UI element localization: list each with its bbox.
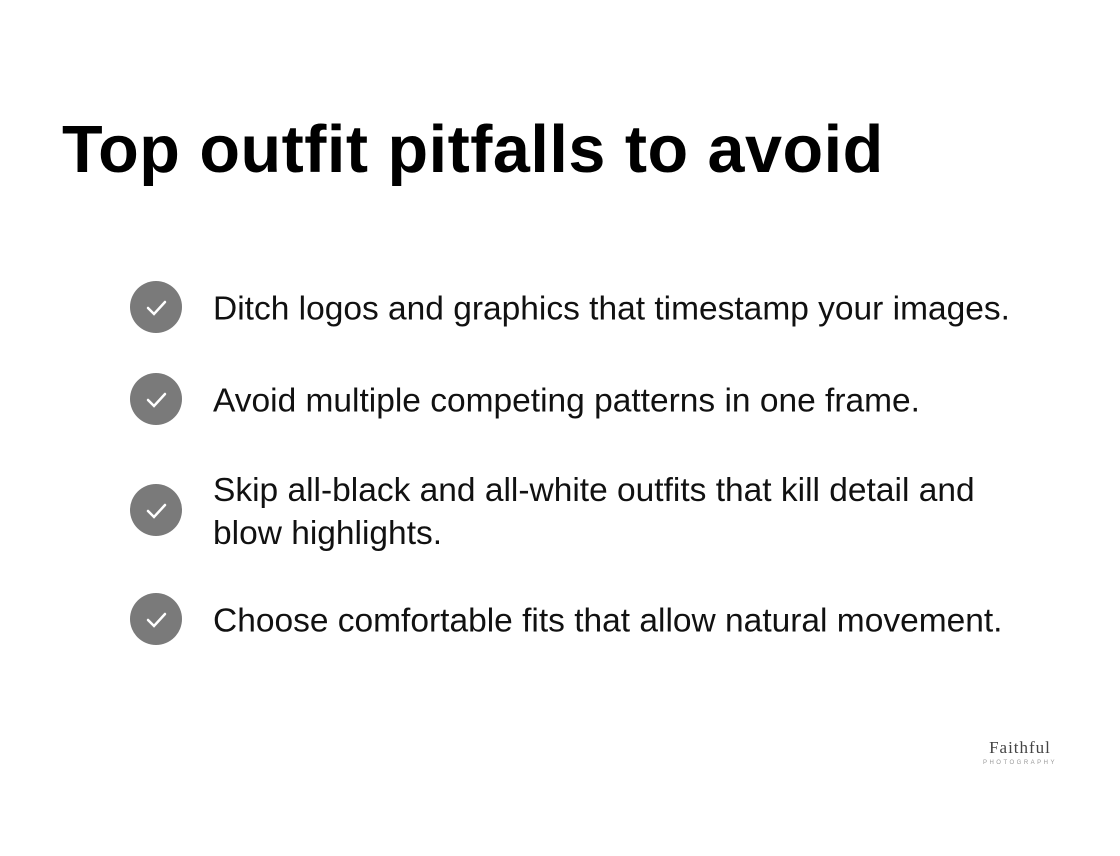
item 3 (130, 472, 975, 552)
title: Top outfit pitfalls to avoid (62, 113, 884, 187)
item 4 (130, 593, 1002, 645)
item 2 (130, 373, 920, 425)
text 2: Avoid multiple competing patterns in one frame. (213, 382, 920, 420)
logo (983, 738, 1057, 766)
text 3: blow highlights. (213, 515, 442, 552)
text 3: Skip all-black and all-white outfits that kill detail and (213, 472, 975, 509)
item 1 (130, 281, 1010, 333)
logo: PHOTOGRAPHY (983, 760, 1057, 766)
icon: check (130, 484, 182, 536)
icon: check (130, 373, 182, 425)
text 3 (213, 472, 975, 552)
icon: check (130, 593, 182, 645)
text 4: Choose comfortable fits that allow natural movement. (213, 602, 1002, 640)
text 1: Ditch logos and graphics that timestamp your images. (213, 290, 1010, 328)
logo: Faithful (989, 738, 1051, 757)
icon: check (130, 281, 182, 333)
